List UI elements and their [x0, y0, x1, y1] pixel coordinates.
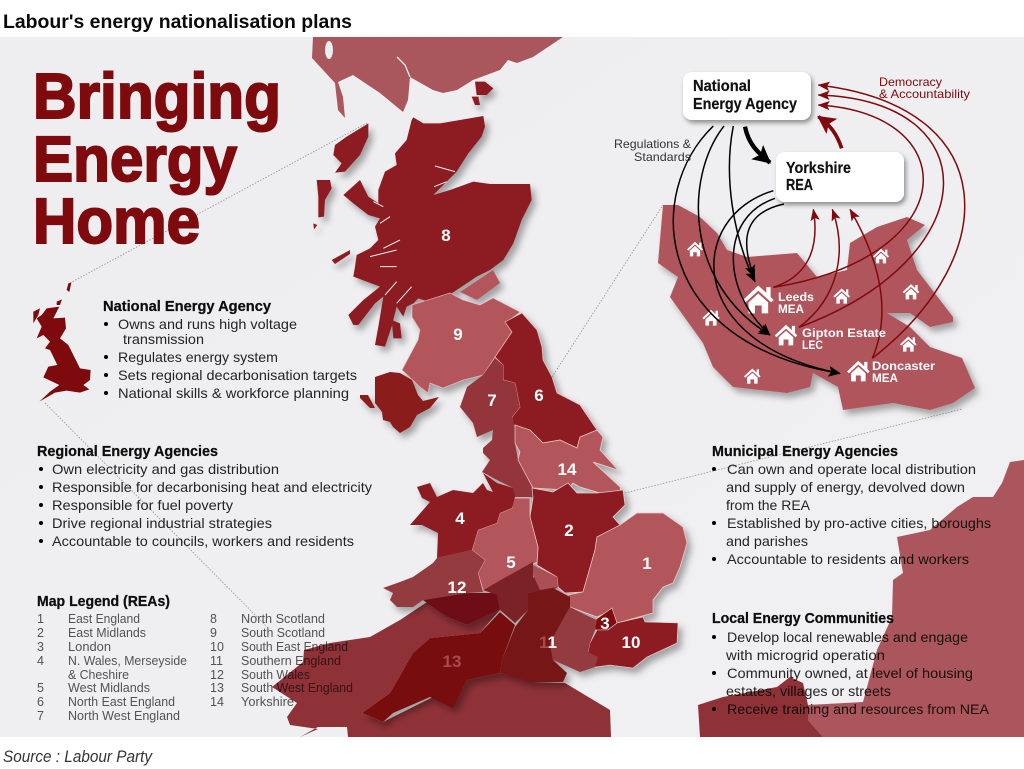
region numbers: 10 [622, 633, 640, 652]
label: Gipton Estate LEC [802, 328, 886, 352]
heading: Bringing Energy Home [33, 60, 281, 257]
legend: Map Legend (REAs): 14 [210, 695, 224, 709]
text block: Regional Energy Agencies: Regional Energy Agencies [37, 443, 218, 460]
text block: Municipal Energy Agencies [712, 443, 991, 567]
text block: Local Energy Communities: with microgrid operation [725, 647, 885, 663]
map: Yorkshire inset [658, 205, 975, 410]
label: Leeds MEA: MEA [778, 304, 804, 316]
legend: Map Legend (REAs): 1 [37, 612, 44, 626]
label: Leeds MEA: Leeds [778, 292, 814, 304]
legend: Map Legend (REAs): 12 [210, 668, 224, 682]
region 8: North Scotland [343, 116, 532, 347]
legend: Map Legend (REAs): South West England [241, 681, 353, 695]
connector lines [45, 123, 962, 628]
region numbers: 11 [539, 633, 557, 652]
map of Britain [272, 37, 1024, 737]
icons: houses [687, 242, 919, 384]
region 5: West Midlands [472, 498, 538, 590]
box: National Energy Agency: National [693, 78, 751, 95]
text block: Regional Energy Agencies [37, 443, 372, 549]
heading: Bringing Energy Home: Bringing [33, 60, 281, 132]
text block: Local Energy Communities: Community owned, at level of housing [727, 665, 973, 681]
legend: Map Legend (REAs): Map Legend (REAs) [37, 593, 170, 610]
Northern Ireland [360, 372, 439, 433]
legend: Map Legend (REAs): 11 [210, 654, 223, 668]
heading: Bringing Energy Home: Home [33, 185, 200, 257]
legend: Map Legend (REAs): 7 [37, 709, 44, 723]
label: Gipton Estate LEC: Gipton Estate [802, 328, 886, 340]
legend: Map Legend (REAs): North Scotland [241, 612, 325, 626]
text block: Municipal Energy Agencies: and parishes [726, 533, 808, 549]
label: Doncaster MEA [872, 361, 936, 385]
region numbers: 8 [441, 226, 451, 245]
land: east continent [808, 460, 1024, 737]
box: Yorkshire REA: REA [786, 177, 813, 194]
region numbers: 4 [455, 509, 465, 528]
region numbers: 5 [506, 553, 516, 572]
West region overlap [483, 562, 558, 623]
label: Democracy and Accountability: Democracy [879, 75, 942, 89]
legend: Map Legend (REAs): 10 [210, 640, 224, 654]
region 9: South Scotland [402, 293, 520, 393]
region 2: East Midlands [530, 483, 625, 593]
label: Democracy and Accountability [879, 75, 970, 101]
region 7: North West England [460, 358, 533, 497]
region 3: London [595, 608, 617, 630]
text block: Municipal Energy Agencies: Established by pro-active cities, boroughs [727, 515, 991, 531]
legend: Map Legend (REAs): 2 [37, 626, 44, 640]
legend: Map Legend (REAs): North East England [68, 695, 175, 709]
land: south band [272, 602, 611, 737]
legend: Map Legend (REAs): London [68, 640, 111, 654]
region numbers: 1 [642, 554, 652, 573]
box: National Energy Agency [683, 72, 811, 120]
legend: Map Legend (REAs): 5 [37, 681, 44, 695]
legend: Map Legend (REAs): Southern England [241, 654, 341, 668]
icon: small UK locator map [33, 283, 91, 402]
text block: Regional Energy Agencies: Responsible for decarbonising heat and electricity [52, 479, 372, 495]
source note: Source : Labour Party [3, 747, 153, 766]
text block: Regional Energy Agencies: Accountable to councils, workers and residents [52, 533, 354, 549]
region 13: South West England [362, 612, 515, 722]
label: Regulations and Standards: Standards [634, 150, 691, 164]
legend: Map Legend (REAs): & Cheshire [68, 668, 129, 682]
legend: Map Legend (REAs): 9 [210, 626, 217, 640]
text block: National Energy Agency: Sets regional decarbonisation targets [118, 367, 357, 383]
region numbers: 9 [453, 325, 463, 344]
label: Leeds MEA [778, 292, 814, 316]
legend: Map Legend (REAs): 6 [37, 695, 44, 709]
label: Democracy and Accountability: & Accountability [879, 87, 970, 101]
text block: National Energy Agency: Regulates energy system [118, 349, 278, 365]
box: Yorkshire REA [776, 152, 904, 202]
arrows: regulations and standards [673, 126, 840, 373]
label: Doncaster MEA: MEA [872, 373, 898, 385]
region 6: North East England [495, 313, 597, 448]
region 14: Yorkshire [515, 425, 621, 494]
text block: Local Energy Communities: Receive training and resources from NEA [727, 701, 990, 717]
title: page heading: Labour's energy nationalisation plans [3, 12, 352, 33]
text block: Municipal Energy Agencies: Can own and operate local distribution [727, 461, 976, 477]
legend: Map Legend (REAs): East England [68, 612, 140, 626]
heading: Bringing Energy Home: Energy [33, 123, 237, 195]
South Wales coast overlap [423, 593, 500, 625]
small light area [533, 565, 558, 590]
text block: Local Energy Communities: Local Energy Communities [712, 610, 894, 627]
region 11 east [550, 607, 598, 672]
text block: Municipal Energy Agencies: from the REA [726, 497, 811, 513]
legend: Map Legend (REAs): South East England [241, 640, 348, 654]
text block: Local Energy Communities: Develop local renewables and engage [727, 629, 968, 645]
legend: Map Legend (REAs): 3 [37, 640, 44, 654]
text block: National Energy Agency: National Energy Agency [103, 298, 272, 315]
legend: Map Legend (REAs): West Midlands [68, 681, 150, 695]
region numbers: 2 [564, 521, 574, 540]
label: Doncaster MEA: Doncaster [872, 361, 936, 373]
text block: Local Energy Communities: estates, villages or streets [726, 683, 891, 699]
legend: Map Legend (REAs): Yorkshire [241, 695, 294, 709]
region numbers: 14 [558, 460, 577, 479]
text block: Regional Energy Agencies: Own electricity and gas distribution [52, 461, 279, 477]
box: Yorkshire REA: Yorkshire [786, 160, 851, 177]
region 11: Southern England [500, 588, 570, 682]
text block: Municipal Energy Agencies: Municipal Energy Agencies [712, 443, 898, 460]
region numbers: 13 [443, 652, 461, 671]
text block: Municipal Energy Agencies: and supply of energy, devolved down [726, 479, 965, 495]
label: Gipton Estate LEC: LEC [802, 340, 823, 352]
region numbers [441, 226, 652, 671]
region numbers: 7 [487, 391, 497, 410]
land: north coast mainland [312, 37, 563, 118]
land: south-east continent dark [698, 677, 823, 737]
legend: Map Legend (REAs): 8 [210, 612, 217, 626]
arrows: democracy and accountability [773, 85, 965, 358]
text block: National Energy Agency: transmission [123, 331, 204, 347]
box: National Energy Agency: Energy Agency [693, 96, 797, 113]
label: Regulations and Standards: Regulations & [614, 137, 691, 151]
legend: Map Legend (REAs) [37, 593, 353, 723]
region numbers: 3 [600, 614, 610, 633]
text block: National Energy Agency: Owns and runs high voltage [118, 316, 297, 332]
legend: Map Legend (REAs): 4 [37, 654, 44, 668]
text block: Local Energy Communities [712, 610, 990, 717]
legend: Map Legend (REAs): North West England [68, 709, 180, 723]
text block: National Energy Agency: National skills & workforce planning [118, 385, 349, 401]
region numbers: 12 [448, 578, 466, 597]
panel: Yorkshire energy diagram [614, 72, 975, 410]
Scottish islands [313, 82, 493, 338]
region 1: East England [568, 513, 687, 623]
legend: Map Legend (REAs): N. Wales, Merseyside [68, 654, 187, 668]
region 4: N. Wales, Merseyside and Cheshire [410, 473, 515, 558]
text block: Municipal Energy Agencies: Accountable to residents and workers [727, 551, 969, 567]
Fife [460, 270, 500, 300]
region numbers: 6 [534, 386, 544, 405]
legend: Map Legend (REAs): East Midlands [68, 626, 146, 640]
legend: Map Legend (REAs): South Wales [241, 668, 310, 682]
legend: Map Legend (REAs): 13 [210, 681, 224, 695]
legend: Map Legend (REAs): South Scotland [241, 626, 325, 640]
text block: Regional Energy Agencies: Responsible for fuel poverty [52, 497, 233, 513]
region 10: South East England [588, 617, 678, 668]
label: Regulations and Standards [614, 137, 691, 164]
text block: Regional Energy Agencies: Drive regional industrial strategies [52, 515, 272, 531]
text block: National Energy Agency [103, 298, 357, 401]
region 12: South Wales [383, 550, 485, 607]
